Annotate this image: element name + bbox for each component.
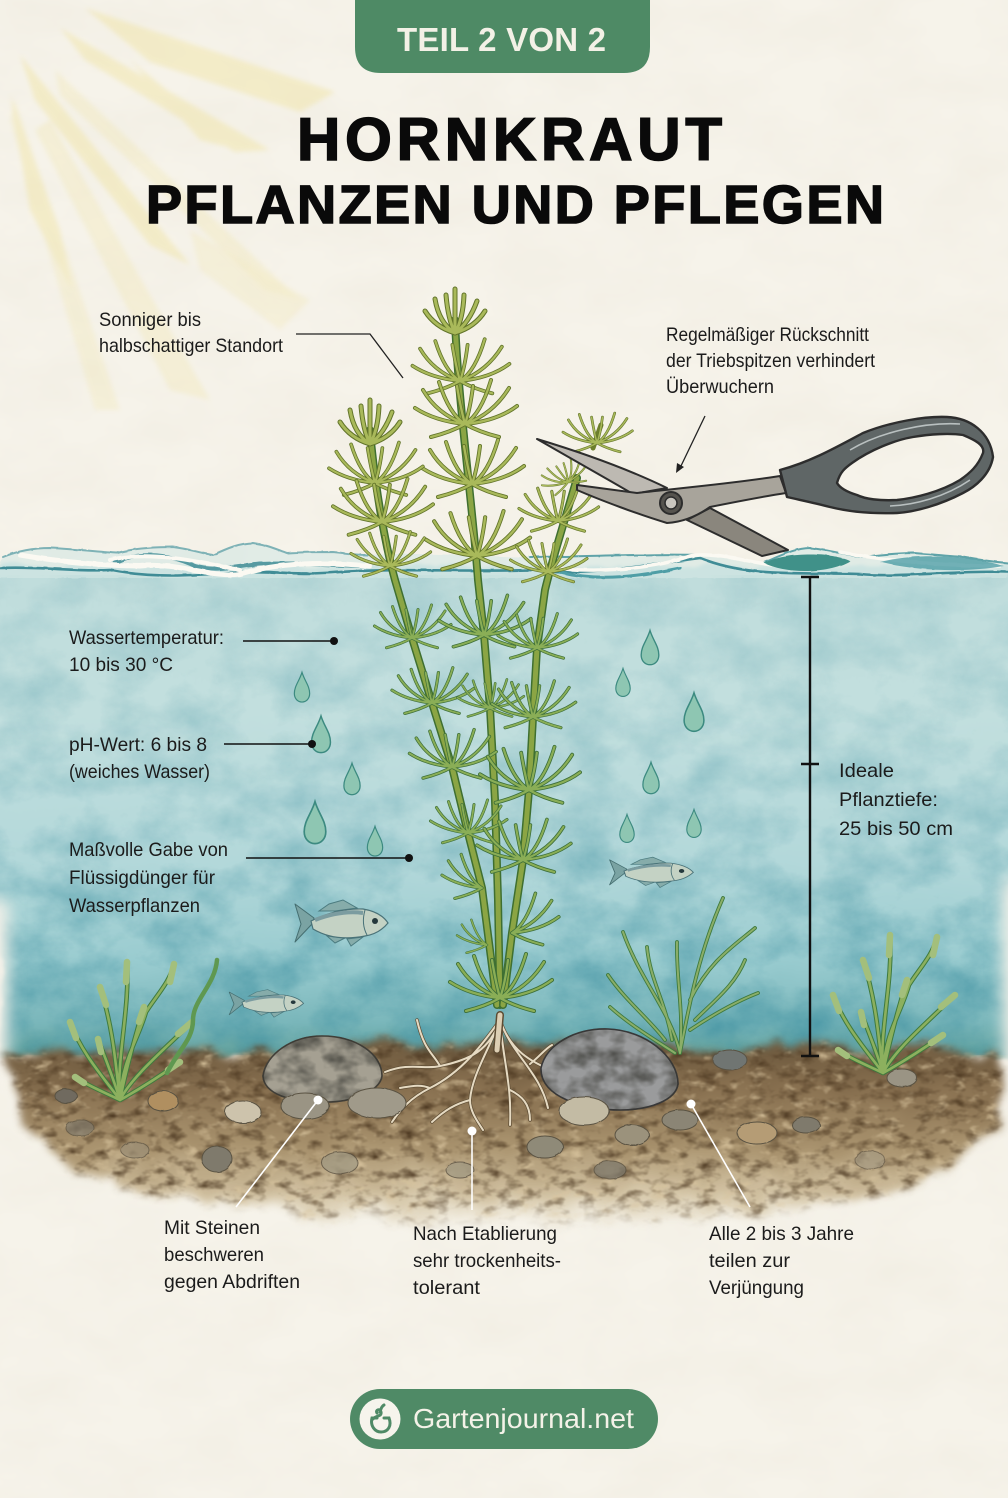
callout: stones: beschweren — [164, 1244, 264, 1266]
callout: pruning: Überwuchern — [666, 376, 774, 398]
badge: part 2 of 2: TEIL 2 VON 2 — [397, 21, 606, 58]
lower blade and shank — [577, 476, 786, 523]
fish: large — [295, 900, 388, 946]
fish: small — [229, 990, 304, 1017]
whorls under water — [374, 595, 580, 1011]
callout: division: Verjüngung — [709, 1277, 804, 1299]
callout: drought tolerance: tolerant — [413, 1277, 481, 1299]
callout: drought tolerance — [413, 1126, 561, 1299]
large stone right — [541, 1029, 678, 1110]
callout: pruning — [666, 324, 876, 473]
badge: part 2 of 2 — [355, 0, 650, 73]
footer logo pill — [350, 1389, 658, 1449]
callout: fertiliser: Maßvolle Gabe von — [69, 839, 228, 861]
callout: pH: (weiches Wasser) — [69, 761, 210, 783]
scissors — [537, 417, 993, 556]
background water plant: left tall frond — [167, 960, 217, 1073]
handle loop — [780, 417, 993, 513]
cut shoot tip — [593, 425, 601, 448]
callout: water temperature — [69, 627, 338, 676]
callout: division — [686, 1100, 854, 1299]
callout: stones — [164, 1096, 322, 1293]
callout: pH: pH-Wert: 6 bis 8 — [69, 734, 207, 756]
handle highlight — [850, 424, 970, 506]
title — [146, 106, 884, 235]
callout: drought tolerance: Nach Etablierung — [413, 1223, 557, 1245]
callout: pruning: Regelmäßiger Rückschnitt — [666, 324, 870, 346]
brand name: Gartenjournal.net — [413, 1403, 634, 1434]
background water plant: left — [70, 962, 192, 1100]
title line 1: HORNKRAUT — [297, 106, 722, 173]
callout: division: teilen zur — [709, 1250, 791, 1272]
depth bracket and label: 25 bis 50 cm — [839, 818, 953, 840]
depth bracket and label — [801, 577, 953, 1056]
callout: drought tolerance: sehr trockenheits- — [413, 1250, 561, 1272]
background water plant: centre right — [608, 898, 758, 1053]
large stone left — [263, 1036, 382, 1102]
soil bed — [4, 1044, 1000, 1223]
callout: pruning: der Triebspitzen verhindert — [666, 350, 876, 372]
stones and pebbles — [55, 1029, 917, 1179]
callout: fertiliser: Wasserpflanzen — [69, 895, 200, 917]
background water plant: right — [833, 935, 955, 1073]
stems — [370, 320, 577, 1005]
callout: pH — [69, 734, 316, 783]
callout: fertiliser: Flüssigdünger für — [69, 867, 215, 889]
paper fade at lower water edges — [0, 880, 1008, 1090]
callout: location: halbschattiger Standort — [99, 335, 284, 357]
title line 2: PFLANZEN UND PFLEGEN — [146, 175, 884, 235]
callout: fertiliser — [69, 839, 413, 917]
callout: stones: gegen Abdriften — [164, 1271, 300, 1293]
depth bracket and label: Pflanztiefe: — [839, 789, 938, 811]
pivot screw — [660, 492, 682, 514]
water droplets — [294, 630, 704, 856]
depth bracket and label: Ideale — [839, 760, 894, 782]
hornwort plant — [329, 289, 632, 1011]
fish: medium — [610, 857, 693, 888]
callout: division: Alle 2 bis 3 Jahre — [709, 1223, 854, 1245]
whorls above water — [329, 289, 632, 582]
callout: location: Sonniger bis — [99, 309, 201, 331]
callout: water temperature: Wassertemperatur: — [69, 627, 224, 649]
roots — [385, 1015, 556, 1130]
callout: stones: Mit Steinen — [164, 1217, 260, 1239]
sun rays — [10, 8, 335, 410]
icon: garden logo — [360, 1398, 400, 1440]
upper blade — [537, 439, 667, 494]
lower blade tail — [687, 508, 788, 556]
small pebbles — [55, 1050, 917, 1179]
water mottling — [0, 575, 1008, 1055]
callout: water temperature: 10 bis 30 °C — [69, 654, 173, 676]
water body — [0, 566, 1008, 1058]
callout: location — [99, 309, 403, 378]
water surface waves — [0, 543, 1008, 578]
